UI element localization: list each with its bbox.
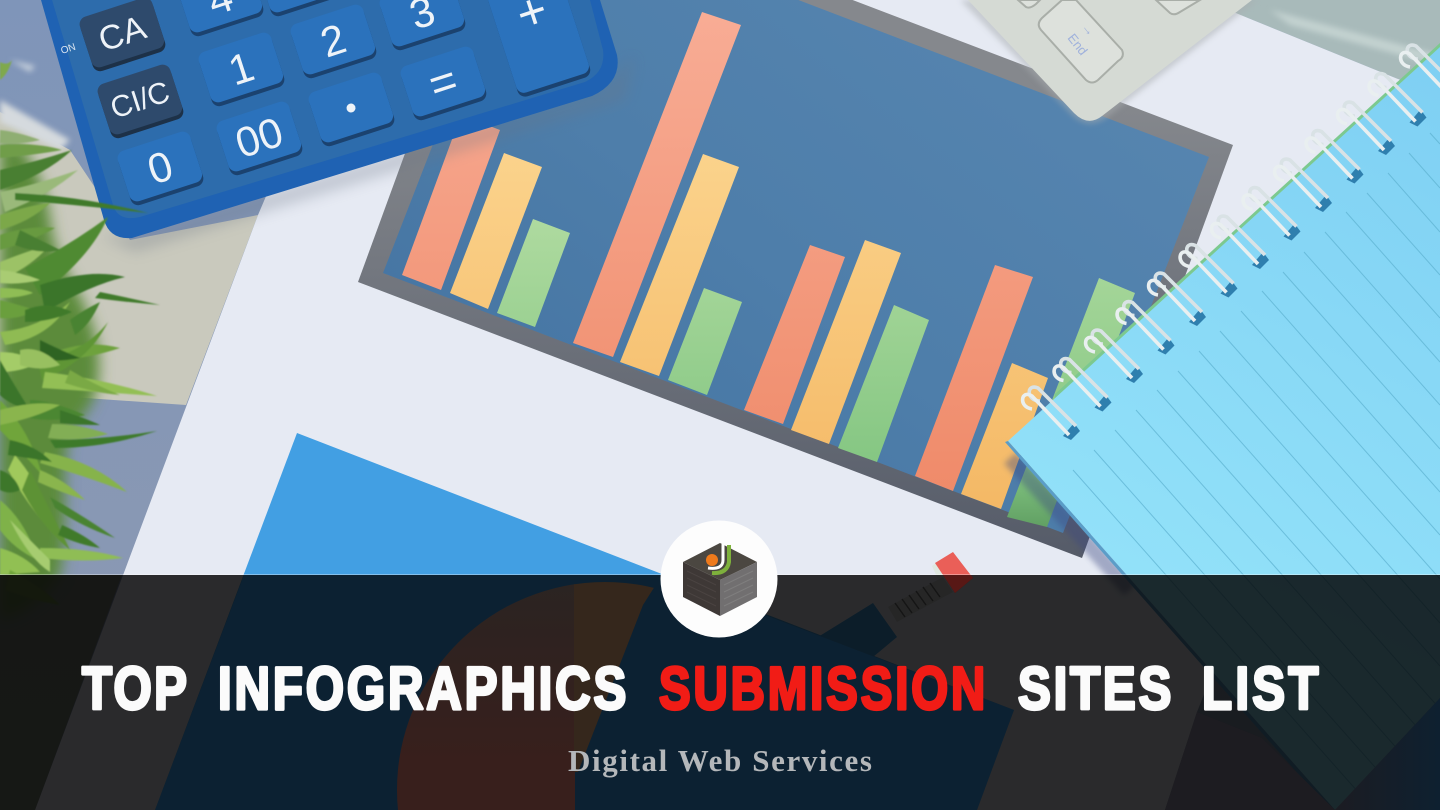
- key equals: [399, 45, 488, 122]
- ON label: ON: [60, 42, 77, 57]
- key CA: CA: [94, 8, 151, 59]
- key CI/C: CI/C: [107, 76, 174, 125]
- logo badge: [660, 520, 778, 638]
- key 2: 2: [315, 15, 352, 66]
- plant: [0, 60, 160, 620]
- End key: End: [1065, 31, 1091, 58]
- notebook: [1005, 43, 1440, 810]
- key 3: [378, 0, 467, 52]
- key 0: 0: [142, 142, 179, 193]
- title: SUBMISSION: [659, 656, 985, 722]
- spiral binding: [1023, 45, 1440, 440]
- title: LIST: [1202, 654, 1318, 722]
- other keys: [1018, 0, 1040, 8]
- cube icon: [683, 543, 757, 616]
- pie chart under band: [397, 582, 654, 810]
- calculator body: [41, 0, 618, 238]
- notebook ruled lines: [1072, 132, 1440, 575]
- notebook green edge: [1055, 43, 1440, 400]
- subtitle: Digital Web Services: [568, 743, 872, 778]
- chart panel frame: [358, 0, 1233, 558]
- key 4: [176, 0, 265, 38]
- key dot: [307, 71, 396, 148]
- chart panel background: [383, 0, 1209, 533]
- key 2: [289, 3, 378, 80]
- title: TOP: [82, 654, 187, 722]
- End key: [1039, 0, 1123, 82]
- grass blades: [0, 60, 160, 605]
- key plus: [480, 0, 592, 99]
- keyboard corner: [960, 0, 1258, 123]
- title: SITES: [1018, 654, 1171, 722]
- key partly hidden: [256, 0, 345, 18]
- notebook cover: [1008, 47, 1440, 810]
- title: [82, 654, 1318, 722]
- key 00: [215, 100, 304, 177]
- key equals: =: [422, 53, 464, 111]
- notebook shadow: [1010, 458, 1130, 590]
- calculator shadow: [100, 55, 635, 252]
- eraser lower part: [943, 575, 973, 593]
- foliage mass: [0, 140, 99, 620]
- title: INFOGRAPHICS: [218, 654, 626, 722]
- key 1: 1: [223, 43, 260, 94]
- left band shade: [0, 575, 122, 810]
- blue tint in band: [155, 575, 1014, 810]
- End key: →: [1079, 20, 1098, 39]
- key CA: [78, 0, 167, 73]
- desk corner under band: [1165, 698, 1440, 810]
- dark title band: [0, 574, 1440, 810]
- key 1: [197, 31, 286, 108]
- key 00: 00: [230, 108, 289, 167]
- key CI/C: [96, 63, 185, 140]
- pen with eraser: [700, 552, 973, 760]
- blue chart block: [155, 433, 1014, 810]
- key 0: [116, 130, 205, 207]
- bar chart: [383, 0, 1209, 533]
- calculator: [41, 0, 618, 238]
